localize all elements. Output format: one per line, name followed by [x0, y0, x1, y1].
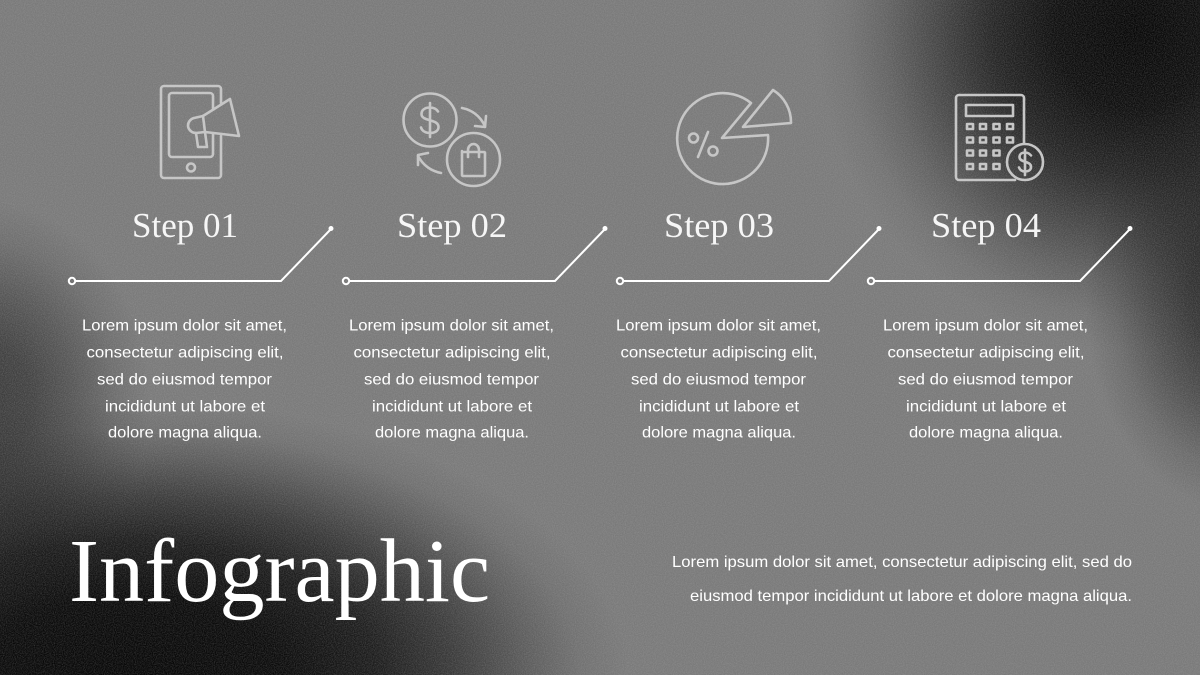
connector: step 01	[69, 226, 334, 284]
connector: step 03	[617, 226, 882, 284]
title: Infographic	[69, 522, 490, 621]
text block: step 01: dolore magna aliqua.	[108, 424, 262, 442]
connector: step 02	[343, 226, 608, 284]
connector: step 04	[868, 226, 1132, 284]
text block: step 02	[349, 318, 554, 442]
text block: step 03	[616, 318, 821, 442]
text block: step 01	[82, 318, 287, 442]
text block: step 01: sed do eiusmod tempor	[97, 372, 273, 388]
text block: step 04: consectetur adipiscing elit,	[888, 344, 1084, 362]
step 04 heading: Step 04	[931, 206, 1041, 245]
text block: step 03: consectetur adipiscing elit,	[620, 344, 818, 362]
text block: step 02: consectetur adipiscing elit,	[354, 344, 550, 362]
text block: step 02: Lorem ipsum dolor sit amet,	[349, 318, 554, 334]
text block: step 04: dolore magna aliqua.	[909, 424, 1063, 442]
text block: step 01: Lorem ipsum dolor sit amet,	[82, 318, 287, 334]
text block: step 03: sed do eiusmod tempor	[631, 372, 807, 388]
text block: step 04: sed do eiusmod tempor	[898, 372, 1074, 388]
icon: pie chart with percent	[677, 90, 791, 184]
text block: step 01: incididunt ut labore et	[105, 398, 266, 416]
text block: step 02: sed do eiusmod tempor	[364, 372, 540, 388]
text block: step 04: Lorem ipsum dolor sit amet,	[883, 318, 1088, 334]
text block: step 01: consectetur adipiscing elit,	[86, 344, 284, 362]
text block: step 03: incididunt ut labore et	[639, 398, 800, 416]
text block: step 04: incididunt ut labore et	[906, 398, 1067, 416]
text block: step 02: dolore magna aliqua.	[375, 424, 529, 442]
icon: phone with megaphone	[161, 86, 239, 178]
text block: step 02: incididunt ut labore et	[372, 398, 533, 416]
text block: step 03: dolore magna aliqua.	[642, 424, 796, 442]
icon: calculator with dollar coin	[956, 95, 1043, 180]
description text: eiusmod tempor incididunt ut labore et dolore magna aliqua.	[690, 588, 1132, 605]
icon: money and shopping bag exchange	[404, 94, 500, 186]
description text	[672, 554, 1132, 605]
step 02 heading: Step 02	[397, 206, 507, 245]
step 01 heading: Step 01	[132, 206, 238, 245]
step 03 heading: Step 03	[664, 206, 774, 245]
description text: Lorem ipsum dolor sit amet, consectetur adipiscing elit, sed do	[672, 554, 1132, 571]
text block: step 03: Lorem ipsum dolor sit amet,	[616, 318, 821, 334]
text block: step 04	[883, 318, 1088, 442]
